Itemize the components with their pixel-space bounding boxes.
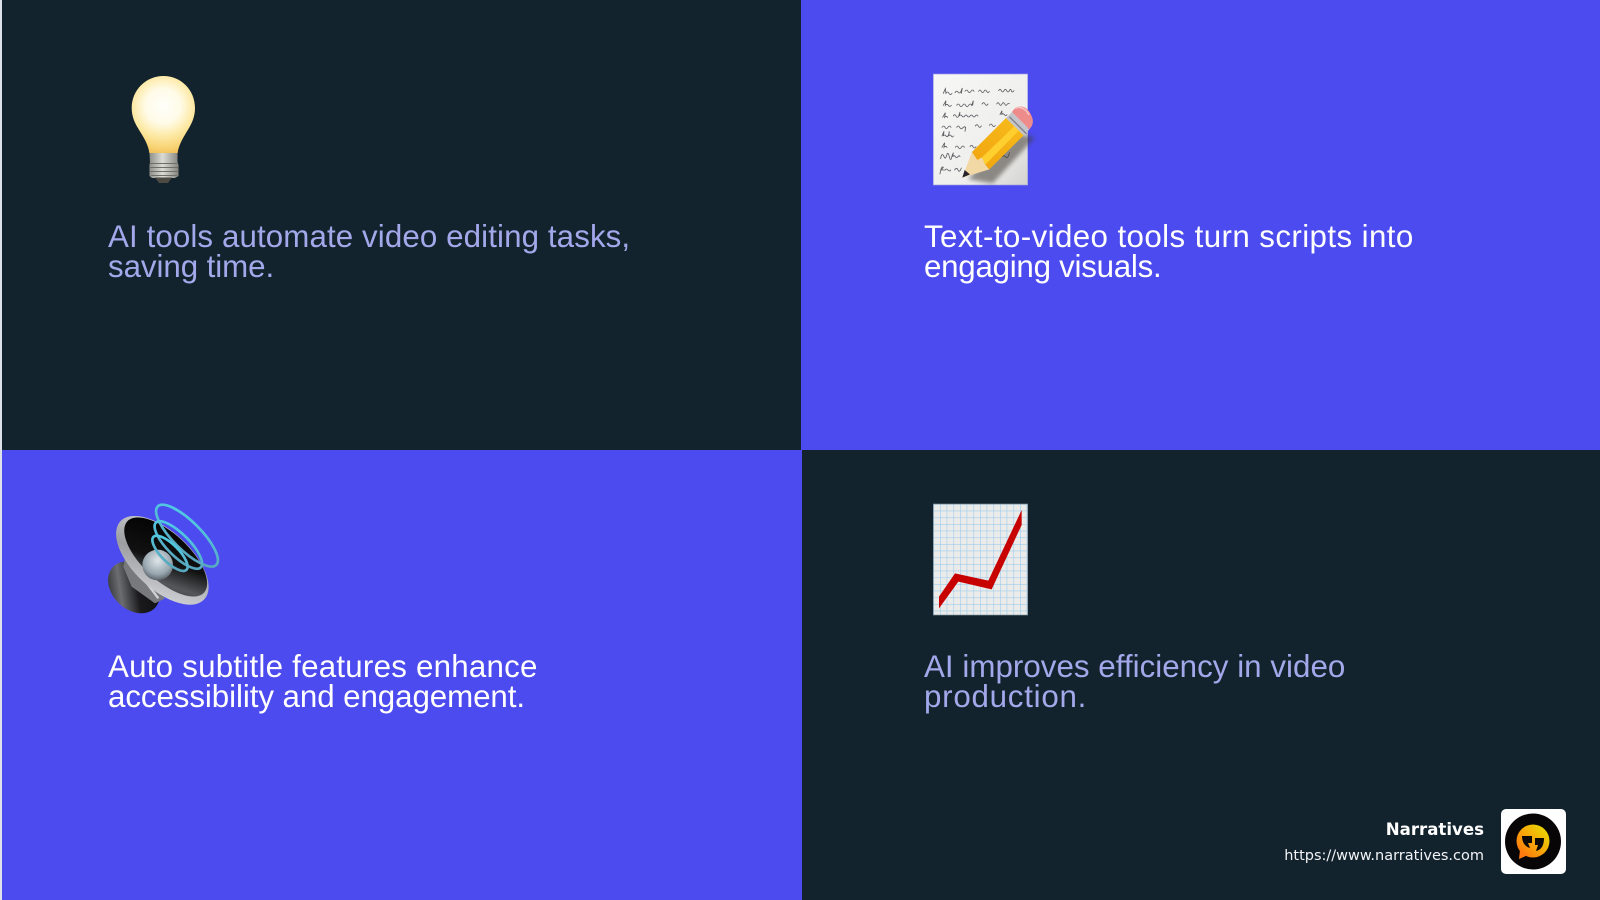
text: scripts: engaging visuals. — [924, 249, 1161, 284]
panel: efficiency — [802, 450, 1600, 900]
panel: automate — [2, 0, 801, 450]
text: scripts: Text-to-video tools turn scripts into — [924, 219, 1414, 254]
left edge — [0, 0, 2, 900]
panel: scripts — [801, 0, 1600, 450]
panel: subtitles — [2, 450, 802, 900]
logo — [1501, 809, 1566, 874]
brand name: Narratives — [1386, 820, 1484, 839]
text: subtitles — [108, 649, 538, 714]
text: subtitles: Auto subtitle features enhance — [108, 649, 538, 684]
icon: speaker — [108, 503, 220, 614]
text: efficiency — [924, 649, 1345, 714]
text: subtitles: accessibility and engagement. — [108, 679, 525, 714]
icon: chart — [933, 504, 1028, 616]
icon: light bulb — [132, 76, 195, 183]
brand block — [1284, 809, 1566, 874]
text: scripts — [924, 219, 1414, 284]
text: efficiency: AI improves efficiency in video — [924, 649, 1345, 684]
text: automate — [108, 219, 630, 284]
icon: memo and pencil — [933, 74, 1036, 186]
text: efficiency: production. — [924, 679, 1087, 714]
text: automate: AI tools automate video editing tasks, — [108, 219, 630, 254]
brand url: https://www.narratives.com — [1284, 848, 1484, 864]
text: automate: saving time. — [108, 249, 274, 284]
